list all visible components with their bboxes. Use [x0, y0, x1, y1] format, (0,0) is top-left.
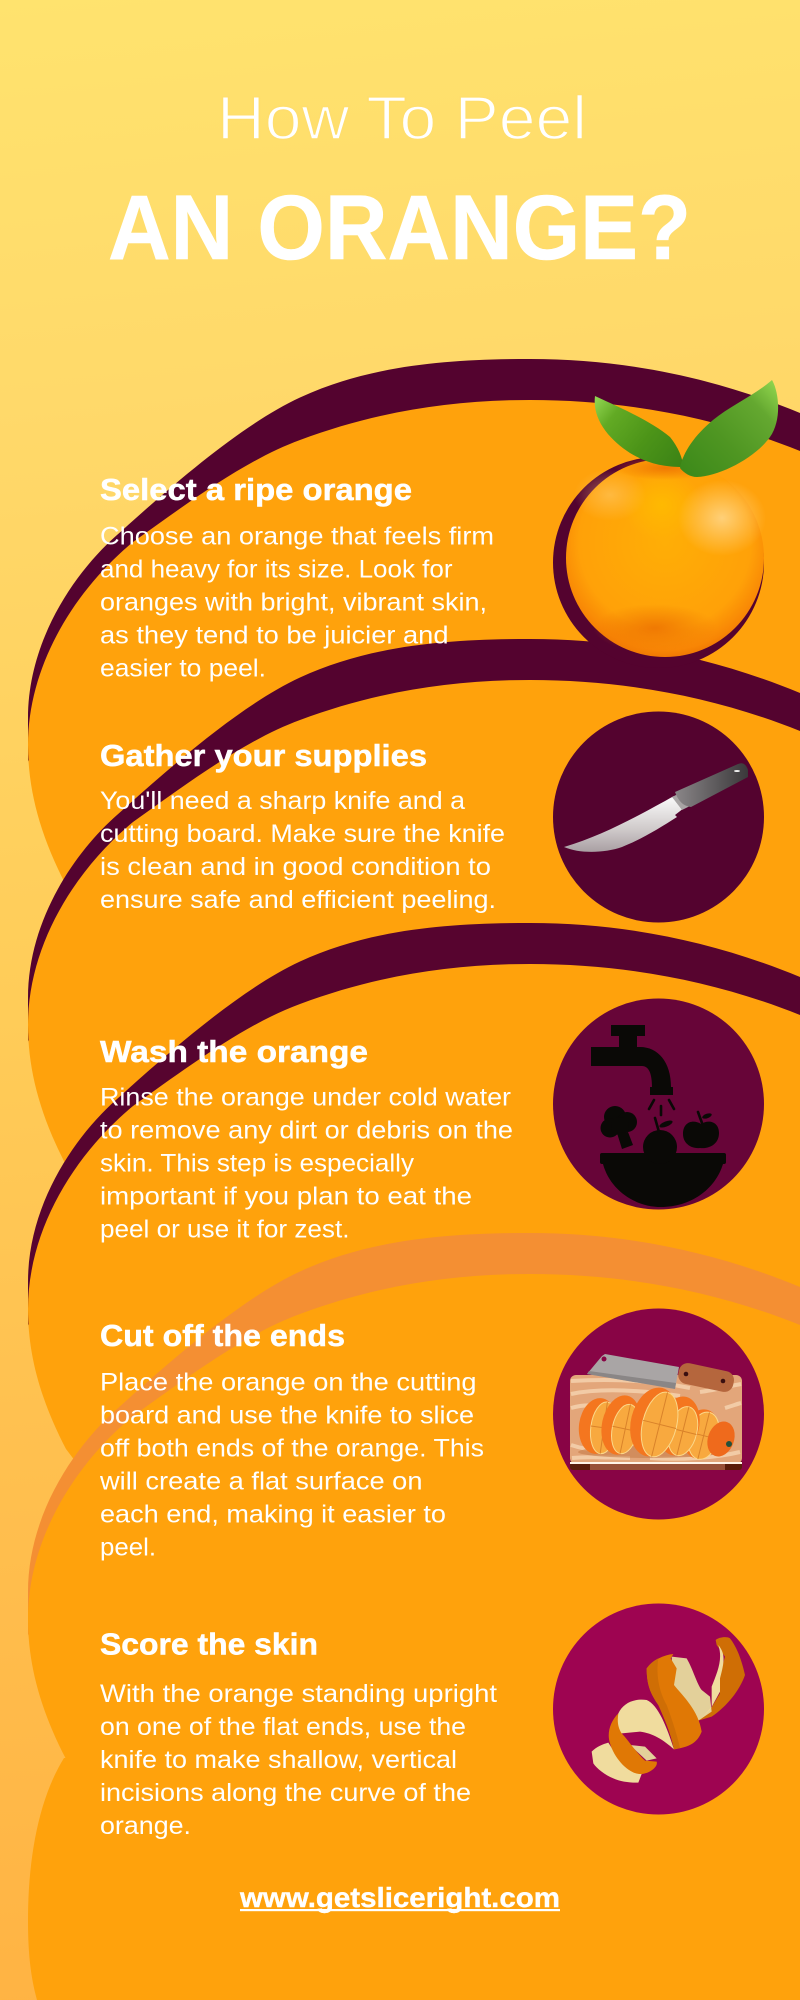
step 2: gather your supplies: ensure safe and efficient peeling.: [100, 886, 496, 914]
step 1: select a ripe orange: oranges with bright, vibrant skin,: [100, 588, 487, 616]
step 3: wash the orange: peel or use it for zest.: [100, 1216, 350, 1244]
step 3: wash the orange: to remove any dirt or debris on the: [100, 1116, 513, 1144]
step 3: wash the orange: Wash the orange: [100, 1034, 368, 1069]
step 5: score the skin: With the orange standing upright: [100, 1680, 497, 1708]
step 4: cut off the ends: will create a flat surface on: [99, 1468, 423, 1496]
icon: washing tap and fruit bowl: [553, 998, 764, 1210]
step 4: cut off the ends: Cut off the ends: [100, 1318, 345, 1353]
step 1: select a ripe orange: and heavy for its size. Look for: [100, 556, 452, 584]
step 3: wash the orange: important if you plan to eat the: [100, 1182, 472, 1210]
step 5: score the skin: Score the skin: [100, 1626, 318, 1662]
step 1: select a ripe orange: [100, 472, 494, 682]
step 4: cut off the ends: Place the orange on the cutting: [100, 1368, 477, 1396]
step 3: wash the orange: [100, 1034, 513, 1244]
step 4: cut off the ends: board and use the knife to slice: [100, 1402, 474, 1430]
icon: spiral orange peel: [553, 1604, 764, 1814]
icon: knife: [553, 712, 764, 922]
wave layer 3: [28, 923, 800, 1494]
step 4: cut off the ends: each end, making it easier to: [100, 1500, 446, 1528]
step 4: cut off the ends: off both ends of the orange. This: [100, 1434, 484, 1462]
step 1: select a ripe orange: Choose an orange that feels firm: [100, 522, 494, 550]
step 5: score the skin: knife to make shallow, vertical: [100, 1746, 457, 1774]
step 4: cut off the ends: [99, 1318, 484, 1562]
step 5: score the skin: [100, 1626, 497, 1840]
step 2: gather your supplies: Gather your supplies: [100, 738, 427, 773]
title: How To Peel: How To Peel: [217, 84, 587, 152]
step 4: cut off the ends: peel.: [100, 1534, 156, 1562]
step 2: gather your supplies: is clean and in good condition to: [100, 853, 491, 881]
wave layer 5: [28, 1758, 800, 2000]
title: An Orange?: AN ORANGE?: [108, 177, 691, 279]
icon: sliced orange on cutting board: [553, 1308, 764, 1520]
step 5: score the skin: incisions along the curve of the: [100, 1779, 471, 1807]
step 1: select a ripe orange: Select a ripe orange: [100, 472, 412, 507]
wave layer 1: [28, 359, 800, 930]
footer website link: www.getsliceright.com: [239, 1882, 560, 1913]
icon: orange with leaves: [553, 380, 778, 668]
step 1: select a ripe orange: as they tend to be juicier and: [100, 622, 448, 650]
wave layer 2: [28, 639, 800, 1210]
step 2: gather your supplies: [100, 738, 505, 914]
step 5: score the skin: orange.: [100, 1812, 191, 1840]
step 5: score the skin: on one of the flat ends, use the: [100, 1713, 466, 1741]
step 3: wash the orange: skin. This step is especially: [100, 1150, 415, 1178]
step 3: wash the orange: Rinse the orange under cold water: [100, 1084, 511, 1112]
step 1: select a ripe orange: easier to peel.: [100, 654, 266, 682]
wave layer 4: [28, 1233, 800, 1804]
step 2: gather your supplies: cutting board. Make sure the knife: [100, 820, 505, 848]
step 2: gather your supplies: You'll need a sharp knife and a: [100, 787, 465, 815]
